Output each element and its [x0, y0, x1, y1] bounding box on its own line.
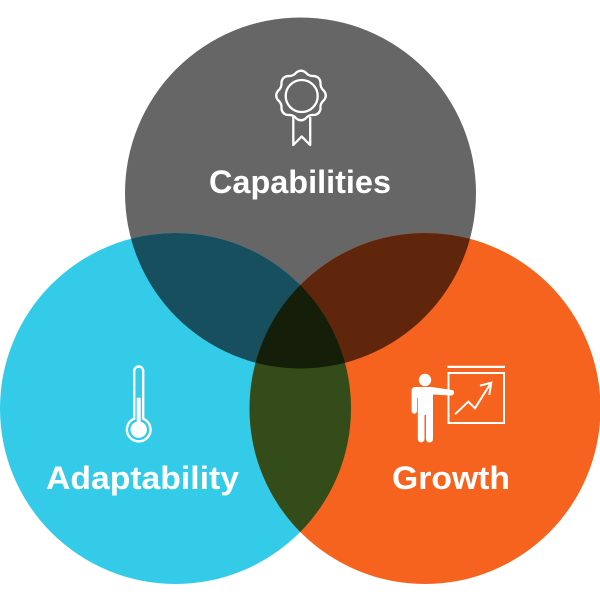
- overlap: all three: [256, 285, 345, 368]
- label: adaptability: Adaptability: [46, 460, 239, 496]
- chart board: [447, 367, 505, 423]
- icon: thermometer: [127, 366, 151, 441]
- label: capabilities: Capabilities: [209, 164, 391, 200]
- icon: award ribbon: [276, 71, 326, 145]
- overlap: capabilities and growth: [256, 233, 470, 363]
- overlap: capabilities and adaptability: [131, 233, 300, 363]
- presenter: [412, 374, 454, 442]
- circle: capabilities: [125, 18, 476, 368]
- label: growth: Growth: [392, 460, 510, 496]
- circle: adaptability: [0, 233, 351, 584]
- icon: presenter with chart: [412, 367, 505, 442]
- circle: growth: [250, 233, 600, 584]
- overlap: adaptability and growth: [250, 285, 351, 532]
